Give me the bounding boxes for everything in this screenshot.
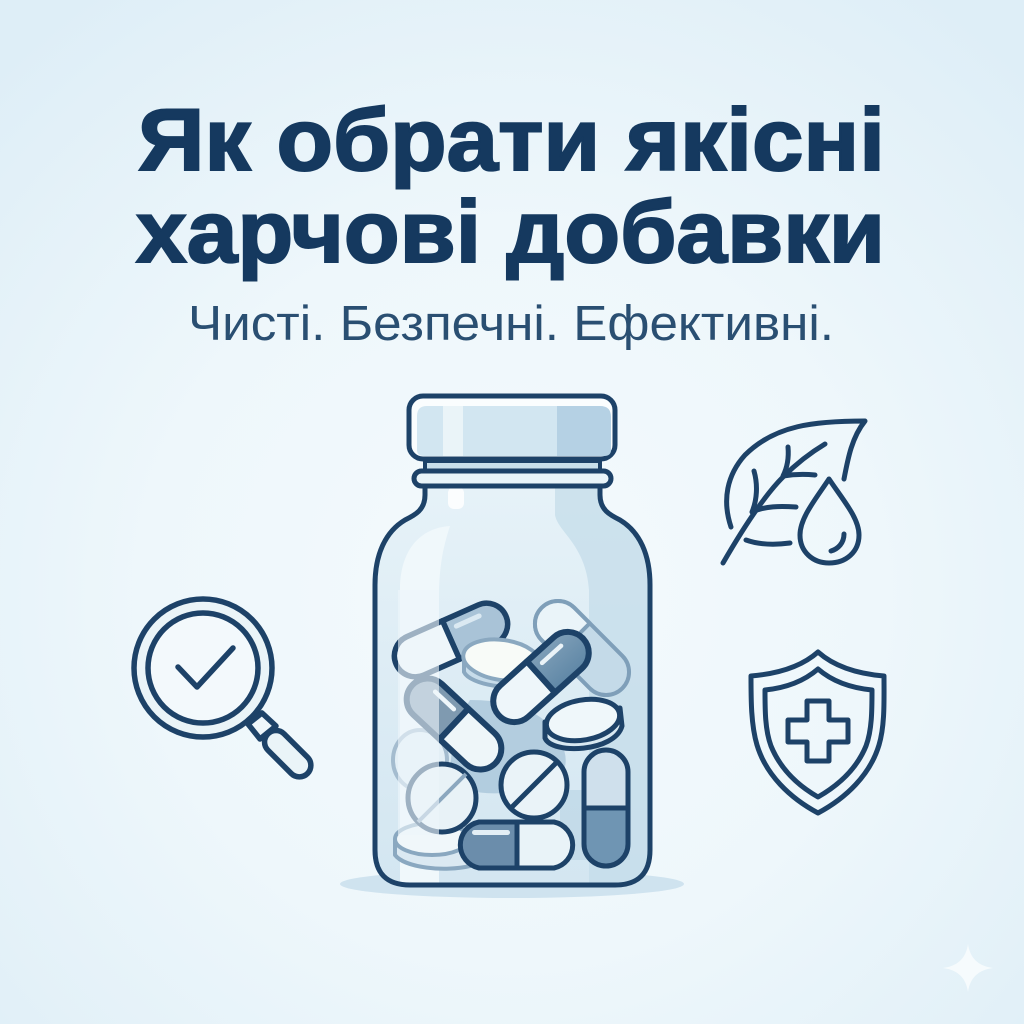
title (136, 90, 885, 281)
tablet: flat back (461, 635, 543, 687)
icon: leaf with drop (723, 421, 865, 563)
capsule: left diagonal (398, 670, 510, 778)
jar neck ring (414, 471, 611, 486)
sparkle mark (943, 944, 993, 992)
title: Як обрати якісні (138, 90, 885, 189)
icon: magnifier with check (134, 599, 316, 782)
jar glass body (370, 485, 655, 890)
tablet: right (543, 694, 623, 749)
tablet: bottom left (395, 823, 470, 869)
pill jar (370, 396, 655, 890)
jar ground shadow (340, 870, 684, 898)
jar neck band (425, 461, 600, 471)
capsule: main dark (485, 623, 597, 731)
round tablet: left scored (408, 764, 476, 832)
pills (388, 590, 639, 869)
faded round pill back (393, 730, 447, 790)
icon: shield with cross (751, 652, 884, 813)
title: харчові добавки (136, 182, 885, 281)
capsule: top left (388, 596, 514, 684)
round tablet: centre scored (501, 752, 567, 818)
pill pile shade (450, 700, 566, 793)
capsule: horizontal (460, 822, 573, 868)
capsule: vertical (584, 750, 628, 866)
jar outline (375, 487, 650, 885)
capsule: back right faded (525, 591, 639, 705)
left glass reflection over pills (398, 590, 439, 835)
jar lid (409, 396, 615, 459)
subtitle: Чисті. Безпечні. Ефективні. (188, 297, 834, 351)
